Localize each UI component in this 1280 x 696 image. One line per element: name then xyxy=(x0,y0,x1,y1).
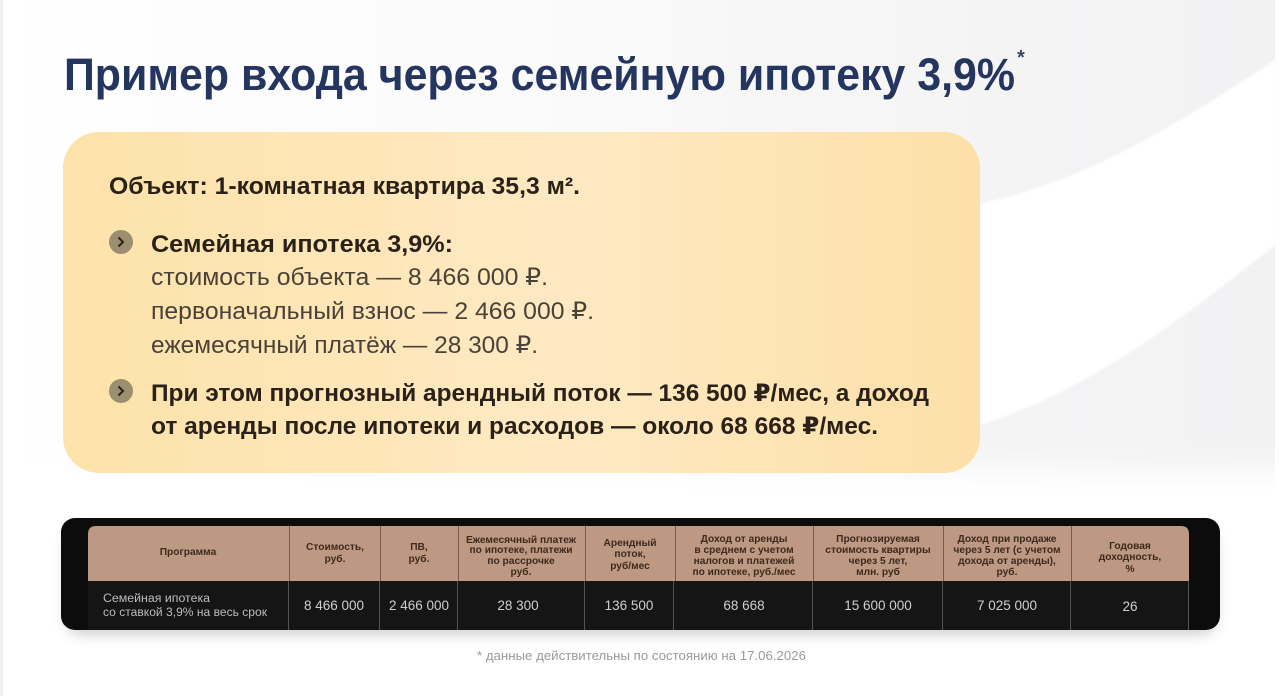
table header row: поток, xyxy=(614,549,646,560)
table header row: % xyxy=(1125,564,1135,575)
table header row: дохода от аренды), xyxy=(958,556,1056,567)
icon: bullet arrow 1 xyxy=(109,230,133,254)
table header row: руб. xyxy=(409,553,430,565)
table header row: млн. руб xyxy=(856,566,900,578)
table header row: через 5 лет, xyxy=(849,556,908,567)
text block: family mortgage terms xyxy=(151,231,594,359)
table data row: 28 300 xyxy=(497,598,539,613)
table header row: стоимость квартиры xyxy=(825,545,931,556)
table header row: руб. xyxy=(511,566,532,578)
footnote: * данные действительны по состоянию на 17.06.2026 xyxy=(477,649,806,663)
table header row: руб. xyxy=(325,553,346,565)
table header row: Ежемесячный платеж xyxy=(466,535,577,546)
table header row: по ипотеке, руб./мес xyxy=(692,566,796,578)
panel: property and mortgage details xyxy=(63,132,980,473)
table data row: 15 600 000 xyxy=(844,598,912,613)
table header row: в среднем с учетом xyxy=(694,545,794,556)
text block: family mortgage terms: стоимость объекта — 8 466 000 ₽. xyxy=(151,264,548,291)
table header row: Стоимость, xyxy=(306,542,364,553)
table header row xyxy=(88,526,1189,581)
table header row: руб/мес xyxy=(610,560,650,572)
table data row: 26 xyxy=(1122,599,1138,614)
table data row: со ставкой 3,9% на весь срок xyxy=(103,607,268,619)
table data row: Семейная ипотека xyxy=(103,593,211,605)
text block: rental income xyxy=(151,380,929,440)
text block: rental income: от аренды после ипотеки и расходов — около 68 668 ₽/мес. xyxy=(151,413,878,440)
table data row: 136 500 xyxy=(605,598,653,613)
table header row: Программа xyxy=(160,547,217,558)
table header row: Арендный xyxy=(604,538,656,549)
table header row: Доход от аренды xyxy=(701,534,787,545)
table header row: Годовая xyxy=(1109,541,1151,552)
table data row: 68 668 xyxy=(723,598,765,613)
text block: family mortgage terms: ежемесячный платёж — 28 300 ₽. xyxy=(151,332,538,359)
table header row: доходность, xyxy=(1099,552,1161,563)
table header row: по рассрочке xyxy=(487,556,555,567)
text block: family mortgage terms: Семейная ипотека 3,9%: xyxy=(151,231,453,258)
table data row: 8 466 000 xyxy=(304,598,364,613)
table header row: налогов и платежей xyxy=(694,556,794,567)
table data row: 2 466 000 xyxy=(389,598,449,613)
table header row: руб. xyxy=(997,566,1018,578)
icon: bullet arrow 2 xyxy=(109,379,133,403)
object heading: Объект: 1-комнатная квартира 35,3 м². xyxy=(109,173,580,200)
table header row: Прогнозируемая xyxy=(836,534,920,545)
table data row: 7 025 000 xyxy=(977,598,1037,613)
title: * xyxy=(1017,47,1025,69)
table data row xyxy=(88,581,1189,630)
text block: rental income: При этом прогнозный арендный поток — 136 500 ₽/мес, а доход xyxy=(151,380,929,407)
table header row: ПВ, xyxy=(410,542,428,553)
table header row: через 5 лет (с учетом xyxy=(953,545,1061,556)
table header row: по ипотеке, платежи xyxy=(470,545,572,556)
table header row: Доход при продаже xyxy=(958,534,1057,545)
text block: family mortgage terms: первоначальный взнос — 2 466 000 ₽. xyxy=(151,298,594,325)
title: Пример входа через семейную ипотеку 3,9% xyxy=(64,49,1015,100)
table: mortgage program figures xyxy=(61,518,1220,630)
